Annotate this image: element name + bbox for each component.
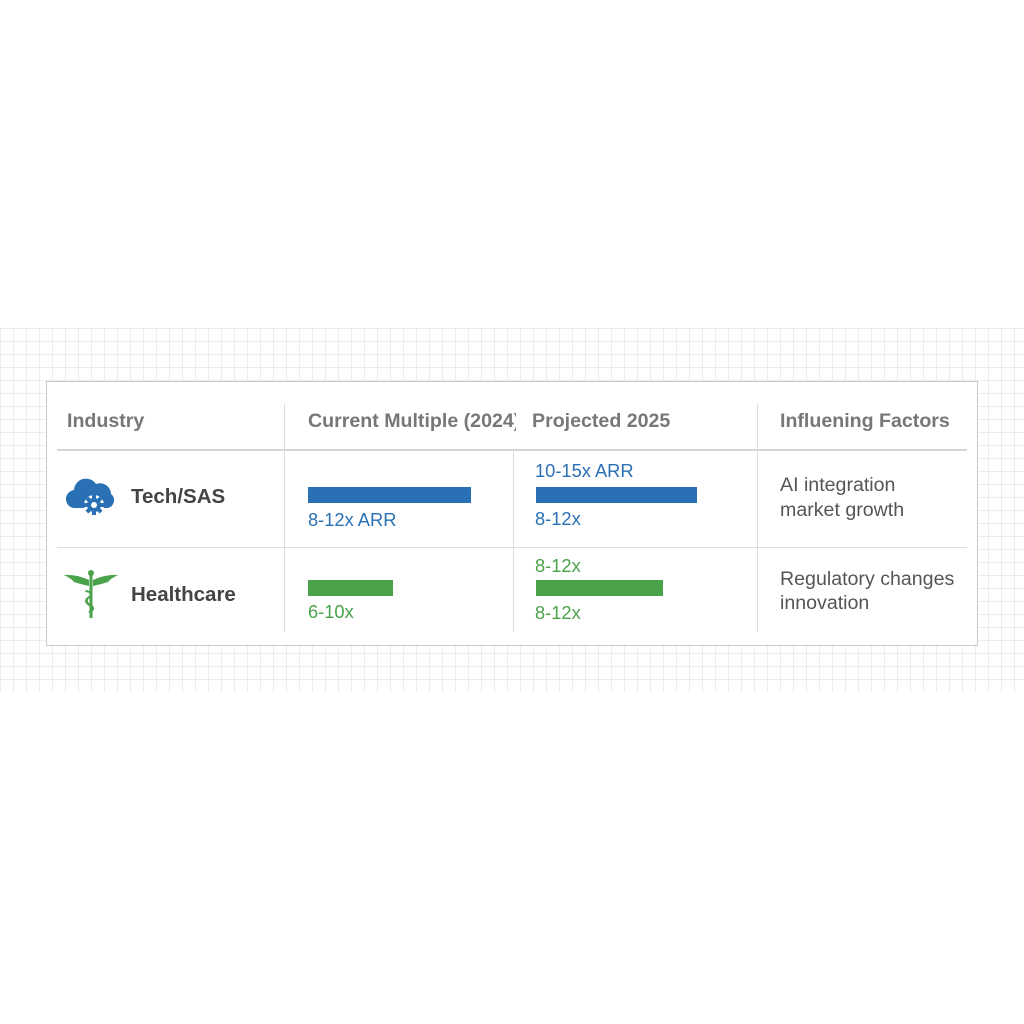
value: 8-12x: 8-12x [535,508,581,529]
factors healthcare: Regulatory changes [780,568,954,590]
factors healthcare: innovation [780,592,869,614]
header: industry: Industry [67,410,144,432]
bar: current healthcare [308,580,393,596]
bar: current tech [308,487,471,503]
bar: projected healthcare [536,580,663,596]
bar: projected tech [536,487,697,503]
table card [46,381,978,646]
header row [67,410,950,432]
icon: cloud gear [66,478,114,515]
header: projected: Projected 2025 [532,410,670,432]
value: 6-10x: 6-10x [308,601,354,622]
label: Healthcare: Healthcare [131,583,236,606]
value: 8-12x ARR: 8-12x ARR [308,509,396,530]
value: 8-12x bottom: 8-12x [535,602,581,623]
value: 8-12x top: 8-12x [535,555,581,576]
row: tech [66,460,904,530]
value: 10-15x ARR: 10-15x ARR [535,460,634,481]
row: healthcare [64,555,954,623]
factors healthcare [780,568,954,614]
header: factors: Influening Factors [780,410,950,432]
factors tech [780,474,904,521]
label: Tech/SAS: Tech/SAS [131,485,225,508]
factors tech: AI integration [780,474,895,496]
icon: caduceus [64,570,118,618]
factors tech: market growth [780,499,904,521]
